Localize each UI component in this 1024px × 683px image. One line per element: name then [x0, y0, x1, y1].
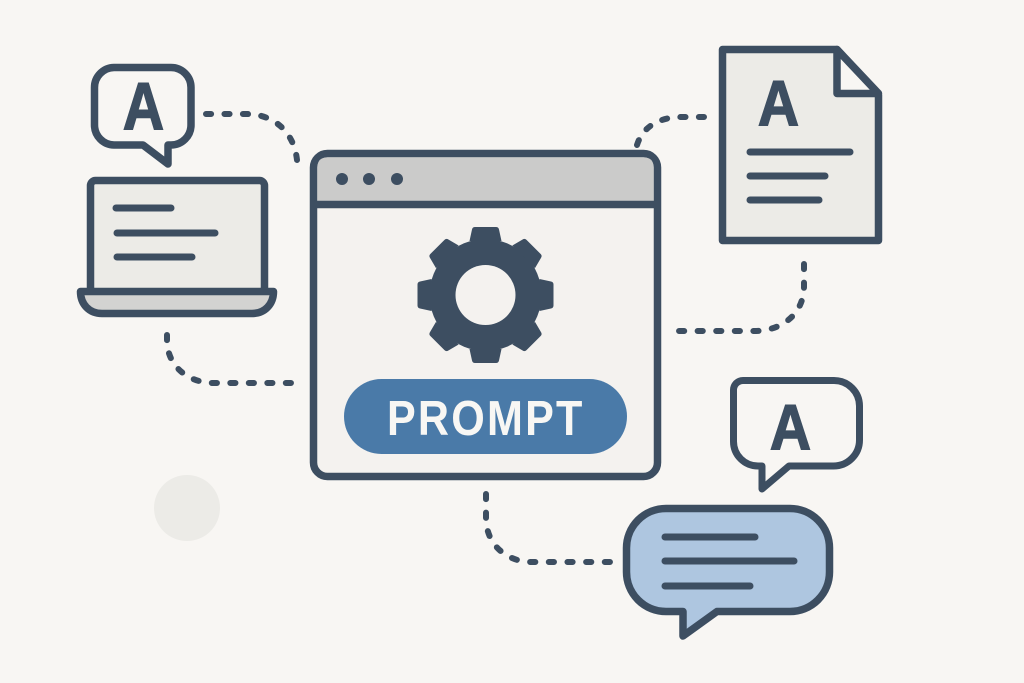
icon: document with letter A: [722, 50, 878, 240]
icon: speech bubble with letter A: [734, 380, 860, 489]
laptop screen: [90, 180, 264, 292]
speech bubble with letter A: [94, 68, 191, 164]
decorative faint circle: [154, 475, 220, 541]
document sheet: [722, 50, 878, 240]
laptop text lines: [116, 208, 215, 257]
laptop base: [80, 292, 274, 314]
window frame: [314, 154, 658, 476]
icon: laptop with speech bubble: [80, 68, 274, 314]
connectors: dashed arrows between icons: [167, 114, 804, 562]
chat text lines: [665, 537, 794, 586]
prompt button: [344, 379, 627, 454]
document fold: [837, 50, 878, 94]
prompt button: PROMPT: [387, 390, 582, 446]
document text lines: [750, 152, 850, 200]
speech bubble with letter A: A: [123, 70, 164, 145]
icon: gear: [418, 227, 554, 363]
window dots: [336, 173, 403, 185]
icon: speech bubble with letter A: A: [770, 391, 811, 463]
icon: blue chat bubble: [626, 508, 830, 636]
panel: central browser window: [314, 154, 658, 476]
title bar: [318, 158, 654, 204]
document letter A: A: [758, 67, 799, 139]
